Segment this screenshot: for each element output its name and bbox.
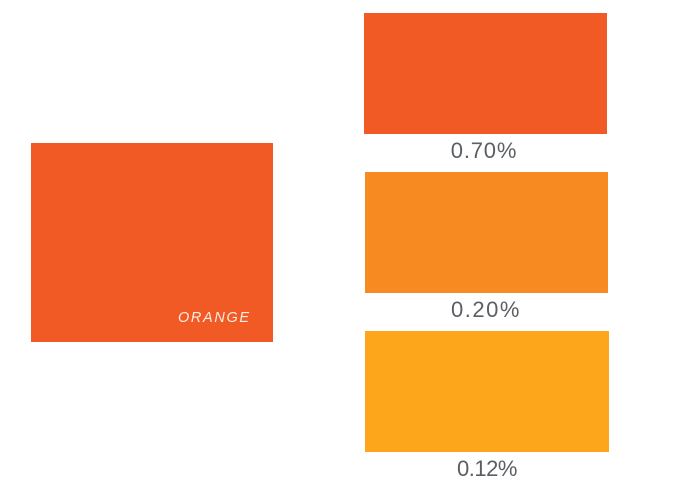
swatch label: ORANGE: ORANGE	[178, 310, 251, 326]
label: 0.20%: 0.20%	[451, 297, 521, 322]
label: 0.70%: 0.70%	[451, 138, 517, 163]
panel: 0.70% colour swatch	[364, 13, 607, 134]
panel: large orange swatch	[31, 143, 273, 342]
panel: 0.12% colour swatch	[365, 331, 609, 452]
panel: 0.20% colour swatch	[365, 172, 608, 293]
label: 0.12%: 0.12%	[457, 456, 517, 481]
